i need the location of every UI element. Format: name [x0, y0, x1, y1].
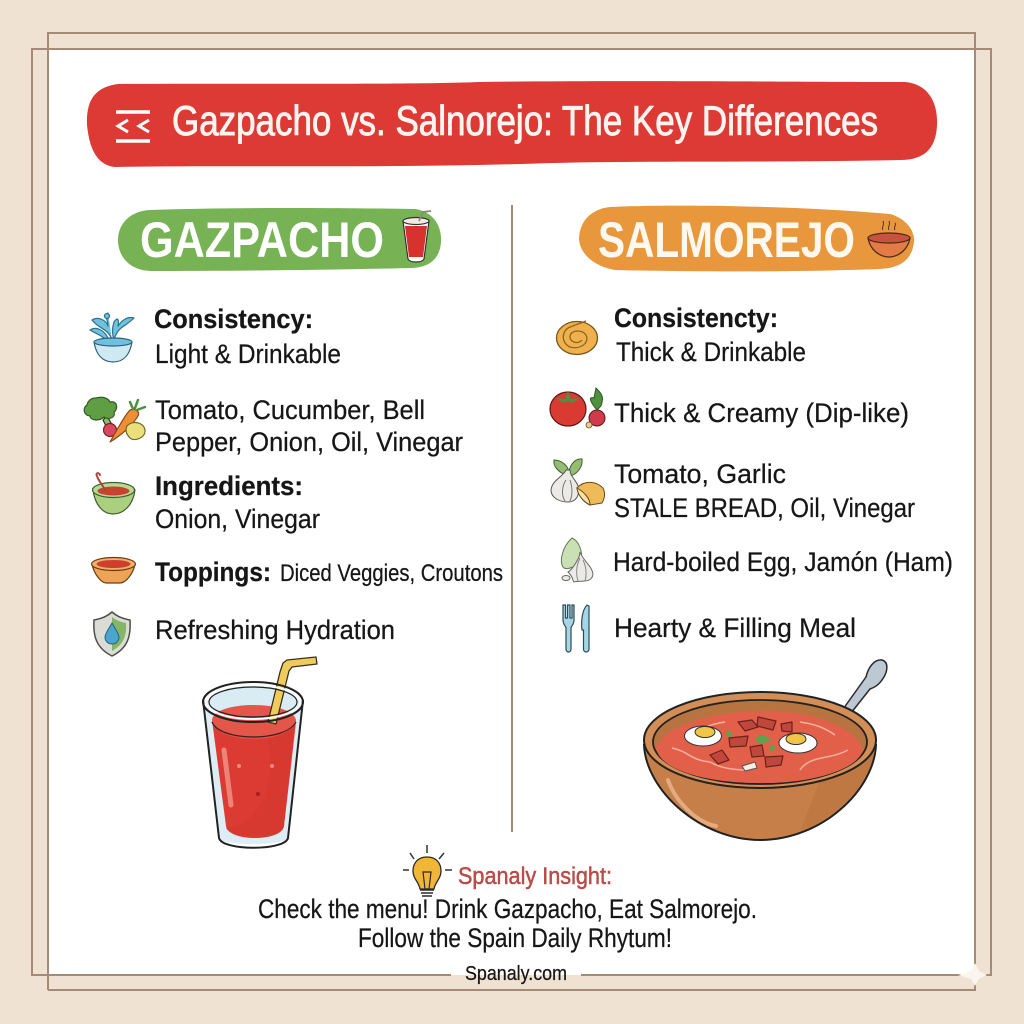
value: Thick & Drinkable: [616, 337, 806, 367]
icon: title chevrons: [116, 112, 150, 141]
bowl rim: [644, 692, 876, 788]
egg crumb: [742, 762, 757, 771]
value: Diced Veggies, Croutons: [280, 560, 503, 587]
item: vegetables: [84, 395, 463, 457]
gazpacho heading pill: GAZPACHO: [140, 212, 384, 268]
spoon: [826, 660, 887, 737]
label: Ingredients:: [155, 471, 303, 501]
item: toppings: [92, 557, 503, 587]
label: Toppings:: [155, 557, 271, 587]
ham cubes: [710, 717, 792, 767]
icon: small gazpacho glass: [403, 211, 431, 262]
value: Hard-boiled Egg, Jamón (Ham): [613, 547, 953, 577]
egg left: [684, 726, 722, 746]
value second line: Pepper, Onion, Oil, Vinegar: [155, 427, 463, 457]
illustration: salmorejo bowl: [644, 660, 887, 840]
insight heading: Spanaly Insight:: [458, 863, 612, 890]
item: ingredients: [92, 471, 320, 534]
icon: small soup bowl: [868, 221, 910, 257]
salmorejo heading pill: SALMOREJO: [598, 212, 855, 268]
icon: orange bowl: [92, 558, 136, 583]
label: Consistencty:: [614, 303, 778, 333]
icon: water splash bowl: [90, 313, 134, 362]
item: benefit: [94, 612, 395, 656]
herbs: [726, 731, 775, 751]
value: Hearty & Filling Meal: [614, 613, 856, 643]
value: Tomato, Cucumber, Bell: [155, 395, 425, 425]
value: Tomato, Garlic: [614, 459, 786, 489]
icon: light bulb: [403, 845, 452, 896]
bowl body: [644, 745, 876, 840]
value second line: STALE BREAD, Oil, Vinegar: [614, 493, 915, 523]
icon: garlic and bread: [551, 459, 605, 505]
item: texture: [550, 388, 909, 428]
insight line one: Check the menu! Drink Gazpacho, Eat Salmorejo.: [258, 894, 757, 924]
panel: salmorejo column: [550, 206, 953, 840]
item: ingredients: [551, 459, 915, 523]
insight line two: Follow the Spain Daily Rhytum!: [358, 923, 672, 953]
panel: gazpacho column: [84, 208, 503, 848]
item: toppings: [561, 538, 953, 582]
illustration: gazpacho glass: [203, 657, 317, 848]
title banner: [87, 81, 937, 167]
icon: egg and garlic: [561, 538, 593, 582]
item: consistency: [556, 303, 806, 367]
footer: Spanaly.com: [465, 963, 567, 985]
item: benefit: [563, 605, 856, 652]
item: consistency: [90, 304, 341, 369]
value: Refreshing Hydration: [155, 615, 395, 645]
egg right: [779, 733, 817, 753]
value: Onion, Vinegar: [155, 504, 320, 534]
icon: tomato and radish: [550, 388, 605, 428]
icon: green bowl: [92, 473, 135, 514]
center divider: [511, 205, 513, 832]
icon: fork and knife: [563, 605, 589, 652]
value: Light & Drinkable: [155, 339, 341, 369]
icon: broccoli carrot beet potato: [84, 397, 145, 442]
label: Consistency:: [154, 304, 313, 334]
value: Thick & Creamy (Dip-like): [614, 398, 909, 428]
callout: spanaly insight: [258, 845, 757, 953]
soup surface: [656, 711, 863, 783]
icon: shield with droplet: [94, 612, 130, 656]
icon: spiral roll: [556, 321, 598, 354]
title text: Gazpacho vs. Salnorejo: The Key Differences: [172, 97, 878, 144]
